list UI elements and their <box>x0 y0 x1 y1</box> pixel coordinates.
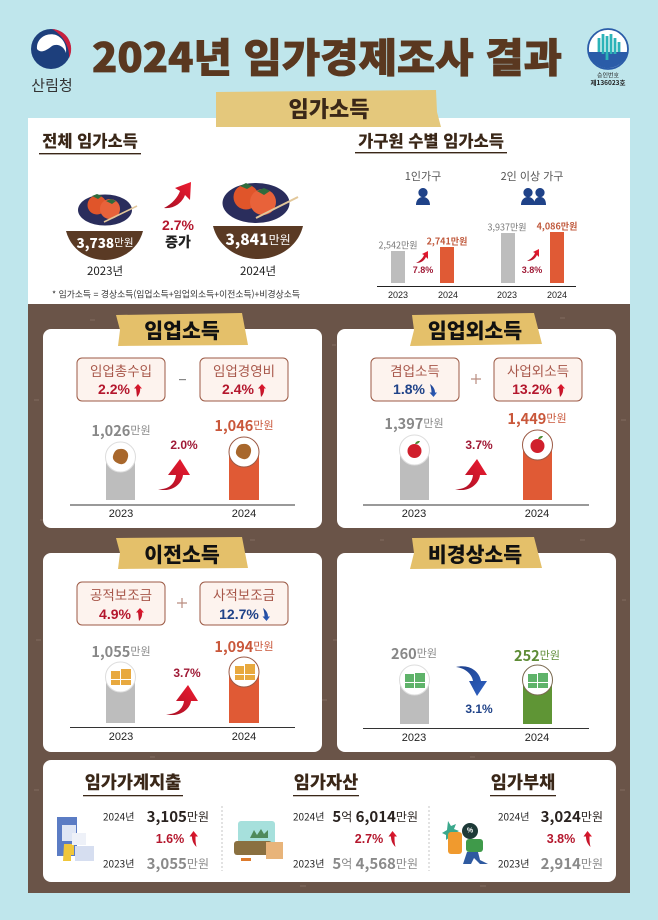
value: 2,542: 2,542만원 <box>378 238 418 252</box>
row: expense 2023 <box>103 852 209 874</box>
box: side business <box>371 358 459 401</box>
bar: 2024 <box>522 665 552 724</box>
years: 2024 <box>232 508 256 520</box>
row: assets 2024: 5억 6,014만원 <box>332 806 418 826</box>
row: debt 2023 <box>498 852 603 874</box>
tape heading: 임업소득 <box>144 314 220 344</box>
box: gross revenue: 2.2% <box>98 381 131 397</box>
years: 2023 <box>402 508 426 520</box>
box: private subsidy: 12.7% <box>219 606 259 622</box>
value: 2024: 1,046만원 <box>214 414 274 436</box>
bar: 2023 one person <box>391 251 405 283</box>
years: 2024 <box>232 731 256 743</box>
years: 2024 <box>547 290 567 300</box>
row: debt 2023: 2023년 <box>498 856 529 870</box>
label: 2024년: 2024년 <box>240 263 276 279</box>
row: assets 2023: 5억 4,568만원 <box>332 852 418 874</box>
box: operating expense: 임업경영비 <box>213 360 275 380</box>
row: assets 2024: 2024년 <box>293 808 324 824</box>
box: other business: 사업외소득 <box>507 360 569 380</box>
icon: receipts <box>57 817 94 861</box>
years: 2024 <box>438 290 458 300</box>
bar: 2024 two or more <box>550 232 564 283</box>
arrow: up <box>455 459 487 490</box>
row: expense 2024: 3,105만원 <box>147 806 209 826</box>
heading tape: 임가소득: 임가소득 <box>289 92 369 124</box>
years <box>402 732 549 744</box>
heading: debt: 임가부채 <box>491 770 555 794</box>
value: 2,741: 2,741만원 <box>427 234 467 248</box>
bowl: 2023 total income: 3,738만원 <box>77 232 133 252</box>
years <box>388 290 567 300</box>
callout: 2.7% increase <box>162 217 195 252</box>
row: expense 2024: 2024년 <box>103 808 134 824</box>
heading: household expense: 임가가계지출 <box>85 770 181 794</box>
value: 2024: 1,094만원 <box>214 636 274 656</box>
change: expense: 1.6% <box>156 832 184 846</box>
icon: greenhouse <box>234 821 283 861</box>
icon: national statistics seal: 제136023호 <box>591 77 625 87</box>
tape heading <box>410 537 542 569</box>
operator: plus <box>471 374 481 384</box>
change: debt: 3.8% <box>547 832 575 846</box>
value: 2023: 1,397만원 <box>384 412 444 434</box>
row: debt 2024: 2024년 <box>498 808 529 824</box>
years: 2023 <box>109 508 133 520</box>
value: 2023: 1,026만원 <box>91 420 151 440</box>
arrow: two or more up <box>527 249 539 261</box>
row: debt 2023: 2,914만원 <box>541 852 603 874</box>
panel: white total income section <box>28 118 630 304</box>
title: 2024년 임가경제조사 결과 <box>92 26 562 84</box>
row: debt 2024: 3,024만원 <box>541 806 603 826</box>
panel: non-forestry income <box>337 313 616 528</box>
change: debt <box>547 831 592 847</box>
change: assets <box>355 831 397 847</box>
icon: persimmon plate 2024 <box>222 183 298 223</box>
heading tape: 임가소득 <box>216 90 441 127</box>
box: public subsidy: 공적보조금 <box>90 584 152 604</box>
footnote: income formula: * 임가소득 = 경상소득(임업소득+임업외소득+이전소득)+비경상소득 <box>52 288 300 300</box>
bar: 2023 two or more <box>501 233 515 283</box>
row: debt 2024 <box>498 806 603 826</box>
icon: debt burden figure: % <box>467 828 474 834</box>
change: expense <box>156 831 198 847</box>
arrow: total income up <box>164 182 191 208</box>
value: 3,937: 3,937만원 <box>487 220 527 234</box>
panel: forestry income <box>43 313 322 528</box>
tape heading <box>410 313 542 346</box>
box: operating expense: 2.4% <box>222 381 255 397</box>
value: 2024: 252만원 <box>514 644 560 666</box>
box: side business: 1.8% <box>393 381 426 397</box>
change: 3.7% <box>465 438 493 452</box>
tape heading: 비경상소득 <box>428 538 522 568</box>
label: one person household: 1인가구 <box>405 168 441 184</box>
operator: minus <box>179 379 186 380</box>
logo: Korea Forest Service: 산림청 <box>31 74 73 96</box>
bar: 2024 <box>229 657 259 723</box>
years <box>402 508 549 520</box>
box: public subsidy <box>77 582 165 625</box>
row: expense 2023: 2023년 <box>103 856 134 870</box>
bar: 2024 <box>229 437 259 500</box>
box: gross revenue: 임업총수입 <box>90 360 152 380</box>
tape heading <box>116 537 248 569</box>
tape heading <box>116 313 248 346</box>
logo: Korea Forest Service <box>31 29 73 96</box>
value: 4,086: 4,086만원 <box>537 220 577 232</box>
panel: household expense, assets and debt <box>43 760 616 882</box>
icon: persimmon plate 2023 <box>78 194 137 226</box>
bowl: 2024 total income <box>213 226 303 259</box>
callout: 2.7% increase: 2.7% <box>162 217 195 233</box>
value: 2023: 260만원 <box>391 642 437 664</box>
icon: national statistics seal <box>588 29 628 87</box>
bar: 2023 <box>106 442 136 500</box>
label: 2023년: 2023년 <box>87 263 123 279</box>
box: public subsidy: 4.9% <box>99 606 132 622</box>
arrow: up <box>158 459 190 490</box>
subheading: 가구원 수별 임가소득: 가구원 수별 임가소득 <box>358 128 504 152</box>
value: 2024: 1,449만원 <box>507 408 567 428</box>
years: 2023 <box>388 290 408 300</box>
years <box>109 508 256 520</box>
panel: extraordinary income <box>337 537 616 752</box>
change: 3.8%: 3.8% <box>522 265 542 275</box>
change: 7.8%: 7.8% <box>413 265 433 275</box>
icon: two people <box>521 188 546 205</box>
years <box>109 731 256 743</box>
row: assets 2023 <box>293 852 418 874</box>
bar: 2023 <box>106 662 136 723</box>
box: side business: 겸업소득 <box>390 360 440 380</box>
change: 3.1% <box>465 702 493 716</box>
bar: 2023 <box>400 435 430 500</box>
years: 2023 <box>497 290 517 300</box>
box: private subsidy <box>200 582 288 625</box>
panel: transfer income <box>43 537 322 752</box>
bar: 2024 <box>522 430 552 500</box>
change: 2.0% <box>170 438 198 452</box>
box: other business <box>494 358 582 401</box>
years: 2024 <box>525 508 549 520</box>
value: 2023: 1,055만원 <box>91 640 151 662</box>
panel: brown background <box>28 304 630 893</box>
bowl: 2023 total income <box>66 231 143 260</box>
bar: 2023 <box>400 665 430 724</box>
row: expense 2023: 3,055만원 <box>147 852 209 874</box>
change: assets: 2.7% <box>355 832 383 846</box>
callout: 2.7% increase: 증가 <box>165 232 191 252</box>
box: private subsidy: 사적보조금 <box>213 584 275 604</box>
change: 3.7% <box>173 666 201 680</box>
arrow: one person up <box>416 251 428 263</box>
panel: household size chart <box>377 168 577 300</box>
row: assets 2023: 2023년 <box>293 856 324 870</box>
tape heading: 이전소득 <box>144 538 220 568</box>
icon: person <box>416 188 430 205</box>
bar: 2024 one person <box>440 247 454 283</box>
heading: assets: 임가자산 <box>294 770 358 794</box>
box: operating expense <box>200 358 288 401</box>
box: other business: 13.2% <box>512 381 552 397</box>
years: 2023 <box>402 732 426 744</box>
arrow: down <box>456 666 487 696</box>
years: 2023 <box>109 731 133 743</box>
label: two or more household: 2인 이상 가구 <box>501 168 563 184</box>
row: assets 2024 <box>293 806 418 826</box>
box: gross revenue <box>77 358 165 401</box>
row: expense 2024 <box>103 806 209 826</box>
years: 2024 <box>525 732 549 744</box>
bowl: 2024 total income: 3,841만원 <box>225 228 291 250</box>
subheading: 전체 임가소득: 전체 임가소득 <box>42 128 138 152</box>
arrow: up <box>166 685 198 715</box>
icon: national statistics seal: 승인번호 <box>597 70 620 80</box>
operator: plus <box>177 598 187 608</box>
icon: debt burden figure <box>442 821 488 864</box>
tape heading: 임업외소득 <box>428 314 522 344</box>
